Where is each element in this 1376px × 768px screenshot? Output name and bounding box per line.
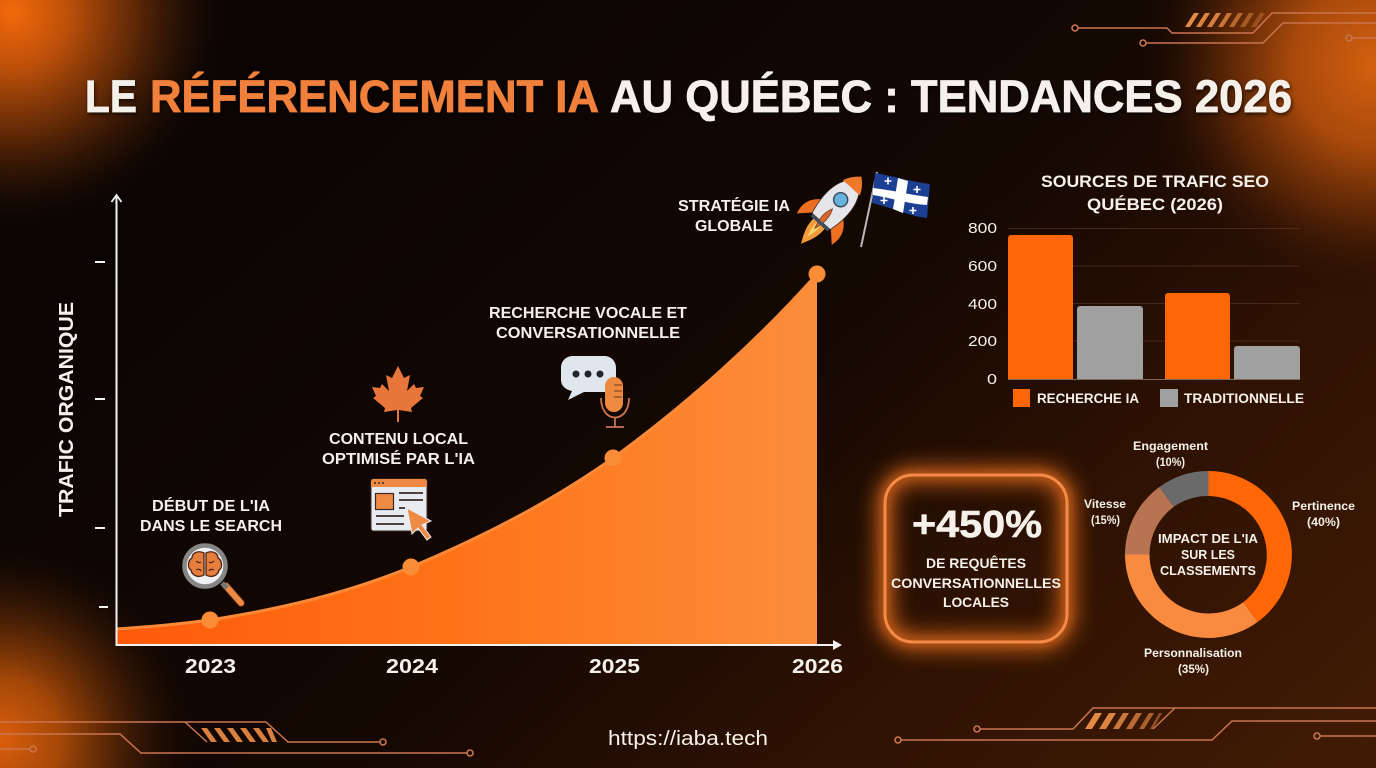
- curve line: [116, 274, 817, 629]
- area under curve: [116, 274, 817, 645]
- donut centre label: SUR LES: [1181, 548, 1235, 562]
- data points: [202, 266, 826, 628]
- callout: +450% stat: LOCALES: [943, 594, 1009, 610]
- callout: +450% stat: [885, 475, 1067, 642]
- milestone 2025 label: [489, 305, 687, 342]
- segment labels: (10%): [1156, 457, 1185, 469]
- y axis values: 800: [968, 221, 997, 237]
- y axis values: 400: [968, 297, 997, 313]
- donut chart: AI impact on rankings: [1084, 441, 1355, 676]
- donut centre label: IMPACT DE L'IA: [1158, 532, 1258, 546]
- bars: [1008, 235, 1073, 379]
- year labels: 2026: [792, 656, 843, 678]
- icon: maple leaf: [372, 366, 424, 422]
- legend: [1013, 389, 1030, 407]
- segment labels: Vitesse: [1084, 499, 1126, 511]
- milestone 2026 label: GLOBALE: [695, 218, 773, 235]
- bar chart: SEO traffic sources: RECHERCHE IA: [1037, 391, 1139, 406]
- y axis values: 0: [987, 372, 997, 388]
- year labels: 2023: [185, 656, 236, 678]
- title: RÉFÉRENCEMENT IA: [150, 71, 599, 122]
- year labels: 2024: [386, 656, 439, 678]
- Vitesse segment: [1125, 487, 1174, 554]
- segment labels: Personnalisation: [1144, 648, 1242, 660]
- footer URL: https://iaba.tech: [608, 728, 768, 750]
- milestone 2026 label: [678, 196, 790, 235]
- Engagement segment: [1159, 471, 1208, 507]
- title: LE: [85, 71, 137, 122]
- icon: rocket: [783, 160, 880, 260]
- bar chart: SEO traffic sources: TRADITIONNELLE: [1184, 391, 1304, 406]
- circuit decoration: top right: [1072, 13, 1376, 46]
- Personnalisation segment: [1125, 554, 1258, 638]
- circuit decoration: bottom left: [0, 722, 473, 756]
- donut centre label: CLASSEMENTS: [1160, 564, 1256, 578]
- milestone 2025 label: CONVERSATIONNELLE: [496, 325, 680, 342]
- chart title: [1041, 172, 1269, 214]
- y axis values: 200: [968, 334, 997, 350]
- year labels: 2025: [589, 656, 640, 678]
- segment labels: (40%): [1307, 517, 1340, 529]
- axes: [95, 195, 842, 650]
- segment labels: (35%): [1178, 664, 1209, 676]
- chart title: SOURCES DE TRAFIC SEO: [1041, 172, 1269, 191]
- callout: +450% stat: +450%: [912, 504, 1042, 546]
- milestone 2023 label: DÉBUT DE L'IA: [152, 496, 270, 515]
- area chart: organic traffic timeline: [56, 195, 843, 678]
- segment labels: Engagement: [1133, 441, 1208, 453]
- callout: +450% stat: DE REQUÊTES: [926, 554, 1026, 571]
- milestone 2023 label: DANS LE SEARCH: [140, 518, 282, 535]
- milestone 2025 label: RECHERCHE VOCALE ET: [489, 305, 687, 322]
- milestone 2024 label: [322, 431, 475, 468]
- segment labels: (15%): [1091, 515, 1120, 527]
- chart title: QUÉBEC (2026): [1087, 195, 1223, 214]
- y axis label: TRAFIC ORGANIQUE: [56, 302, 78, 517]
- segment labels: Pertinence: [1292, 501, 1355, 513]
- callout: +450% stat: CONVERSATIONNELLES: [891, 575, 1061, 591]
- icon: chat bubble and microphone: [561, 356, 629, 427]
- bar chart: SEO traffic sources: [968, 172, 1304, 407]
- milestone 2024 label: OPTIMISÉ PAR L'IA: [322, 449, 475, 468]
- year labels: [185, 656, 843, 678]
- title: [85, 71, 1292, 122]
- icon: web page and cursor: [371, 479, 431, 540]
- donut centre label: [1158, 532, 1258, 578]
- circuit decoration: bottom right: [895, 708, 1376, 743]
- y axis values: [968, 221, 997, 388]
- segment labels: [1084, 441, 1355, 676]
- milestone 2026 label: STRATÉGIE IA: [678, 196, 790, 215]
- milestone 2023 label: [140, 496, 282, 535]
- y axis values: 600: [968, 259, 997, 275]
- milestone 2024 label: CONTENU LOCAL: [329, 431, 468, 448]
- icon: brain magnifier: [184, 546, 241, 603]
- Pertinence segment: [1208, 471, 1292, 622]
- icon: Quebec flag: [861, 172, 930, 247]
- title: AU QUÉBEC : TENDANCES 2026: [610, 71, 1292, 122]
